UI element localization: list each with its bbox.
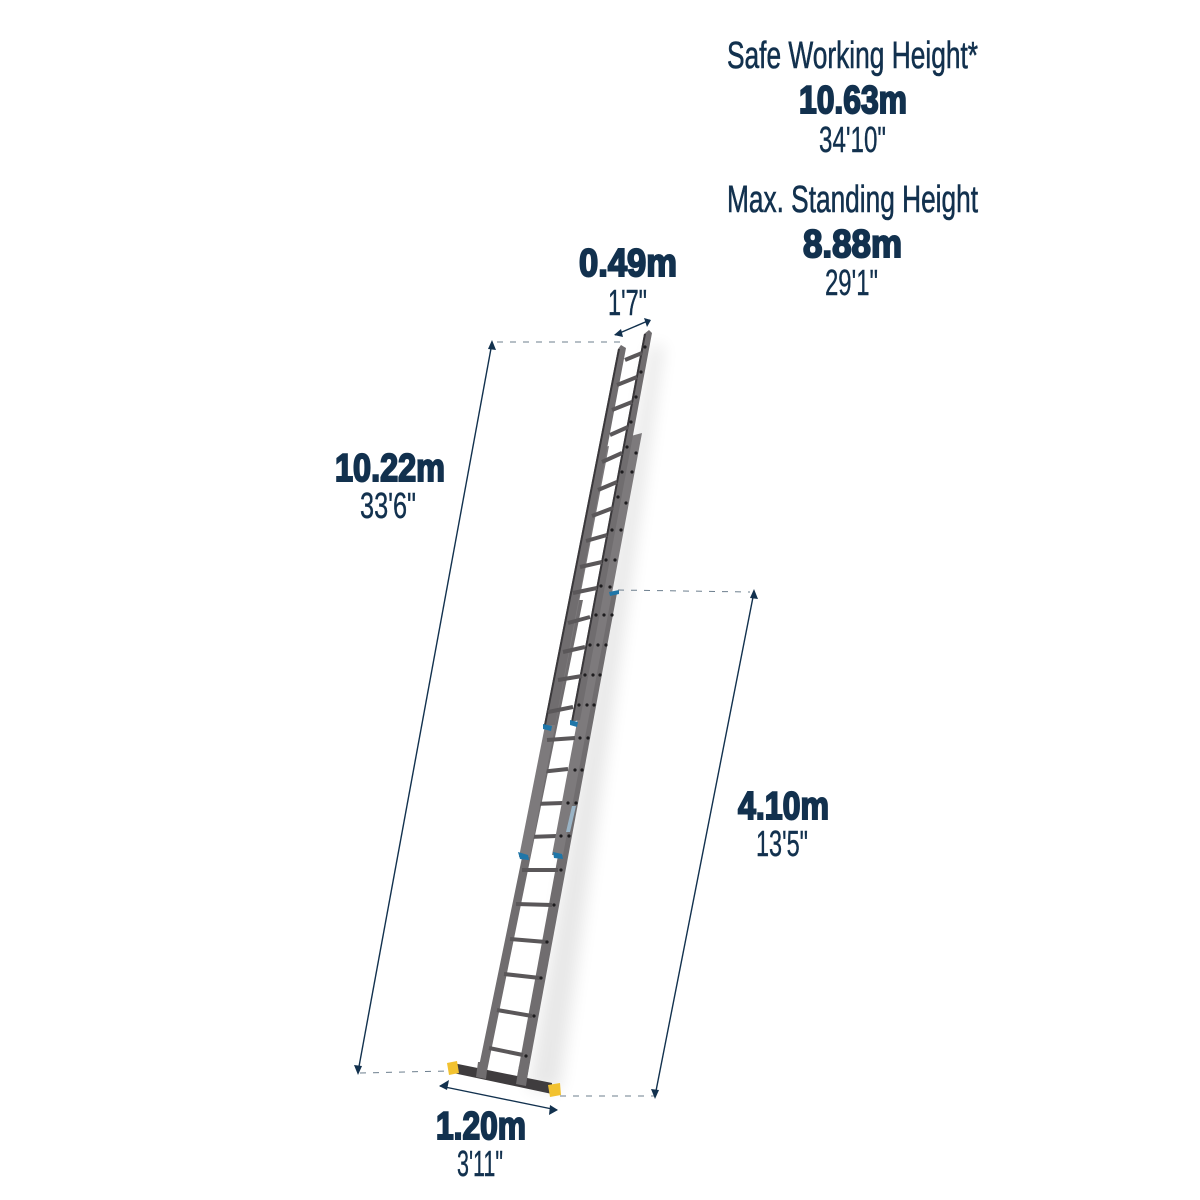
label: stabiliser width: 3'11" (457, 1143, 503, 1184)
label: closed length: 4.10m (738, 785, 829, 828)
arrow: extended length (354, 340, 496, 1075)
arrow: closed length (651, 589, 758, 1099)
ladder shadow (528, 345, 664, 1090)
ladder illustration (447, 330, 652, 1097)
label: closed length: 13'5" (756, 823, 808, 864)
label: stabiliser width (436, 1105, 526, 1184)
text block: max standing height: Max. Standing Height (727, 179, 978, 221)
text block: safe working height: 10.63m (799, 79, 907, 122)
top section (543, 330, 652, 740)
label: top width: 0.49m (579, 242, 677, 285)
text block: safe working height: Safe Working Height* (727, 35, 978, 77)
middle section (518, 433, 642, 860)
label: top width: 1'7" (608, 282, 647, 323)
bottom section (477, 593, 617, 1084)
label: closed length (738, 785, 829, 864)
label: extended length (335, 447, 445, 526)
text block: max standing height: 8.88m (803, 223, 902, 266)
arrow: top width (614, 318, 651, 337)
label: extended length: 10.22m (335, 447, 445, 490)
label: extended length: 33'6" (360, 485, 416, 526)
dashed guides (360, 342, 750, 1096)
label: stabiliser width: 1.20m (436, 1105, 526, 1148)
text block: safe working height (727, 35, 978, 160)
text block: max standing height: 29'1" (825, 262, 878, 303)
bolts (524, 345, 647, 1058)
text block: max standing height (727, 179, 978, 303)
stabiliser bar (447, 1061, 561, 1097)
arrow: stabiliser width (439, 1080, 558, 1115)
label: top width (579, 242, 677, 323)
text block: safe working height: 34'10" (819, 119, 886, 160)
